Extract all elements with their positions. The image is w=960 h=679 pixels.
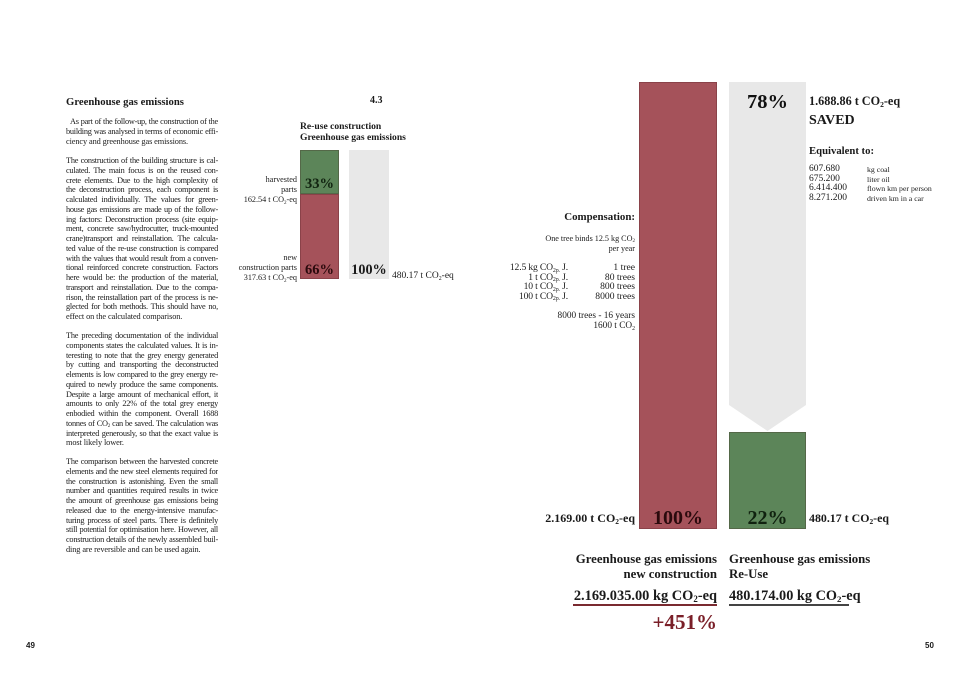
- paragraph 4: the amount of greenhouse gas emissions being: [66, 496, 218, 505]
- paragraph 3: by cutting and transporting the deconstructed: [66, 360, 218, 369]
- small chart title: [300, 120, 406, 143]
- paragraph 3: quired to newly produce the same components.: [66, 380, 218, 389]
- compensation table right: 80 trees: [605, 272, 635, 283]
- small chart title: Greenhouse gas emissions: [300, 132, 406, 143]
- paragraph 2: tional reinforced concrete construction. Factors: [66, 263, 218, 272]
- bar: harvested parts 33%: 33%: [305, 176, 334, 192]
- compensation result: [558, 311, 635, 332]
- paragraph 2: transport and reinstallation. Due to the compa-: [66, 283, 218, 292]
- compensation table left: 12.5 kg CO2p. J.: [510, 262, 568, 274]
- paragraph 2: ment, concrete saw/hydrocutter, truck-mounted: [66, 224, 218, 233]
- bar: new construction 100%: [639, 82, 717, 529]
- paragraph 4: construction details of the newly assembled buil-: [66, 535, 218, 544]
- compensation table left: 10 t CO2p. J.: [524, 281, 568, 293]
- paragraph 2: ing factors: Deconstruction process (site equip-: [66, 214, 218, 224]
- paragraph 2: The construction of the building structure is cal-: [66, 156, 218, 165]
- section number: 4.3: [370, 95, 382, 106]
- saved figure: 1.688.86 t CO2-eq: [809, 94, 900, 109]
- arrow: saved 78%: [729, 82, 806, 431]
- total: new construction: 2.169.035.00 kg CO2-eq: [574, 588, 717, 604]
- label: harvested parts: harvested: [266, 175, 297, 184]
- paragraph 2: effect on the calculated comparison.: [66, 312, 182, 321]
- compensation result: 1600 t CO2: [593, 321, 635, 332]
- paragraph 1: ciency and greenhouse gas emissions.: [66, 136, 188, 146]
- bar: re-use 22%: 22%: [748, 507, 788, 529]
- paragraph 2: here would be: the production of the material,: [66, 273, 218, 282]
- label: harvested parts: parts: [281, 185, 297, 194]
- caption: new construction: new construction: [624, 567, 717, 581]
- equivalents values: 8.271.200: [809, 193, 847, 203]
- paragraph 3: amounts to only 22% of the total grey energy: [66, 399, 218, 408]
- bar: total 100%: 100%: [351, 262, 387, 278]
- equivalents values: [809, 164, 847, 203]
- paragraph 1: [66, 117, 218, 146]
- caption: re-use: Re-Use: [729, 567, 768, 581]
- paragraph 3: The preceding documentation of the individual: [66, 331, 218, 340]
- paragraph 2: crete elements. Due to the high complexity of: [66, 176, 218, 184]
- label: new construction parts: 317.63 t CO2-eq: [244, 273, 297, 284]
- paragraph 3: elements is low compared to the grey energy re-: [66, 370, 218, 379]
- paragraph 4: elements and the new steel elements required for: [66, 467, 218, 476]
- equivalents units: flown km per person: [867, 184, 932, 193]
- compensation heading: Compensation:: [564, 211, 635, 223]
- paragraph 2: with the values that would result from a conven-: [66, 254, 218, 262]
- equivalents units: [867, 165, 932, 203]
- equivalents units: kg coal: [867, 165, 890, 174]
- bar: new construction parts 66%: 66%: [305, 262, 334, 278]
- paragraph 3: enbodied within the component. Overall 1688: [66, 409, 218, 418]
- arrow: saved 78%: 78%: [747, 91, 788, 113]
- label: new construction parts: new: [283, 253, 297, 262]
- bar: new construction parts 66%: [300, 194, 339, 279]
- paragraph 2: calculated individually. The values for green-: [66, 195, 218, 204]
- paragraph 3: Despite a large amount of mechanical effort, it: [66, 390, 218, 398]
- paragraph 4: the construction is astonishing. Even the small: [66, 476, 218, 486]
- compensation table right: 8000 trees: [595, 291, 635, 302]
- heading: greenhouse gas emissions: Greenhouse gas emissions: [66, 96, 184, 108]
- compensation table left: [510, 262, 568, 302]
- caption: new construction: Greenhouse gas emissions: [576, 552, 717, 566]
- paragraph 1: building was analysed in terms of economic effi-: [66, 127, 218, 136]
- paragraph 4: The comparison between the harvested concrete: [66, 457, 218, 466]
- total: re-use: 480.174.00 kg CO2-eq: [729, 588, 861, 604]
- compensation table left: 100 t CO2p. J.: [519, 291, 568, 302]
- compensation block: [510, 211, 635, 332]
- tree binding note: [545, 234, 635, 253]
- tree binding note: per year: [609, 244, 635, 252]
- label: total: 480.17 t CO2-eq: [392, 271, 454, 282]
- paragraph 3: [66, 331, 218, 447]
- saved label: SAVED: [809, 113, 855, 128]
- paragraph 2: house gas emissions are made up of the follow-: [66, 205, 218, 214]
- bar: harvested parts 33%: [300, 150, 339, 194]
- compensation result: 8000 trees - 16 years: [558, 311, 635, 321]
- equivalent heading: Equivalent to:: [809, 145, 874, 157]
- caption: re-use: Greenhouse gas emissions: [729, 552, 870, 566]
- compensation table left: 1 t CO2p. J.: [528, 272, 568, 283]
- bar: new construction 100%: 100%: [653, 507, 703, 529]
- paragraph 2: [66, 156, 218, 321]
- paragraph 3: interpreted generously, so that the exact value is: [66, 428, 218, 438]
- label: re-use total: 480.17 t CO2-eq: [809, 511, 889, 526]
- equivalents values: 607.680: [809, 164, 840, 174]
- paragraph 2: glected for both methods. This should have no,: [66, 302, 218, 311]
- small chart title: Re-use construction: [300, 120, 381, 132]
- equivalents values: 6.414.400: [809, 183, 847, 193]
- body text: [66, 117, 218, 554]
- label: new construction parts: construction parts: [239, 263, 297, 272]
- paragraph 4: [66, 457, 218, 554]
- compensation table right: 800 trees: [600, 281, 635, 292]
- equivalents units: driven km in a car: [867, 194, 924, 203]
- paragraph 2: rison, the reinstallation part of the process is ne-: [66, 292, 218, 302]
- tree binding note: One tree binds 12.5 kg CO2: [545, 234, 635, 244]
- paragraph 2: crane)transport and reinstallation. The calcula-: [66, 234, 218, 243]
- bar: total 100%: [349, 150, 389, 279]
- paragraph 3: most likely lower.: [66, 438, 124, 447]
- paragraph 4: ding are reversible and can be used again.: [66, 545, 200, 554]
- equivalents units: liter oil: [867, 175, 890, 184]
- paragraph 3: teresting to note that the grey energy generated: [66, 350, 218, 360]
- label: new construction parts: [238, 253, 297, 284]
- paragraph 3: components states the calculated values. It is in-: [66, 341, 218, 350]
- small chart: re-use construction: [238, 120, 454, 284]
- caption: re-use: [729, 552, 870, 581]
- paragraph 4: released due to the energy-intensive manufac-: [66, 506, 218, 515]
- compensation table right: 1 tree: [613, 262, 635, 273]
- paragraph 2: culated. The main focus is on the reused con-: [66, 166, 218, 175]
- equivalents values: 675.200: [809, 174, 840, 184]
- page number 49: 49: [26, 641, 35, 650]
- label: harvested parts: [244, 175, 297, 206]
- caption: new construction: [576, 552, 717, 581]
- paragraph 4: number and quantities required results in twice: [66, 486, 218, 495]
- paragraph 2: the deconstruction process, each component is: [66, 185, 218, 194]
- paragraph 4: turing process of steel parts. There is definitely: [66, 516, 218, 524]
- compensation table right: [595, 262, 635, 302]
- paragraph 2: ted value of the re-use construction is compared: [66, 244, 218, 253]
- label: harvested parts: 162.54 t CO2-eq: [244, 195, 297, 206]
- paragraph 4: still potential for optimisation here. However, all: [66, 525, 218, 534]
- paragraph 1: As part of the follow-up, the construction of the: [70, 117, 218, 126]
- bar: re-use 22%: [729, 432, 806, 529]
- label: new construction total: 2.169.00 t CO2-eq: [545, 511, 635, 526]
- page number 50: 50: [925, 641, 934, 650]
- difference: +451%: +451%: [653, 610, 717, 634]
